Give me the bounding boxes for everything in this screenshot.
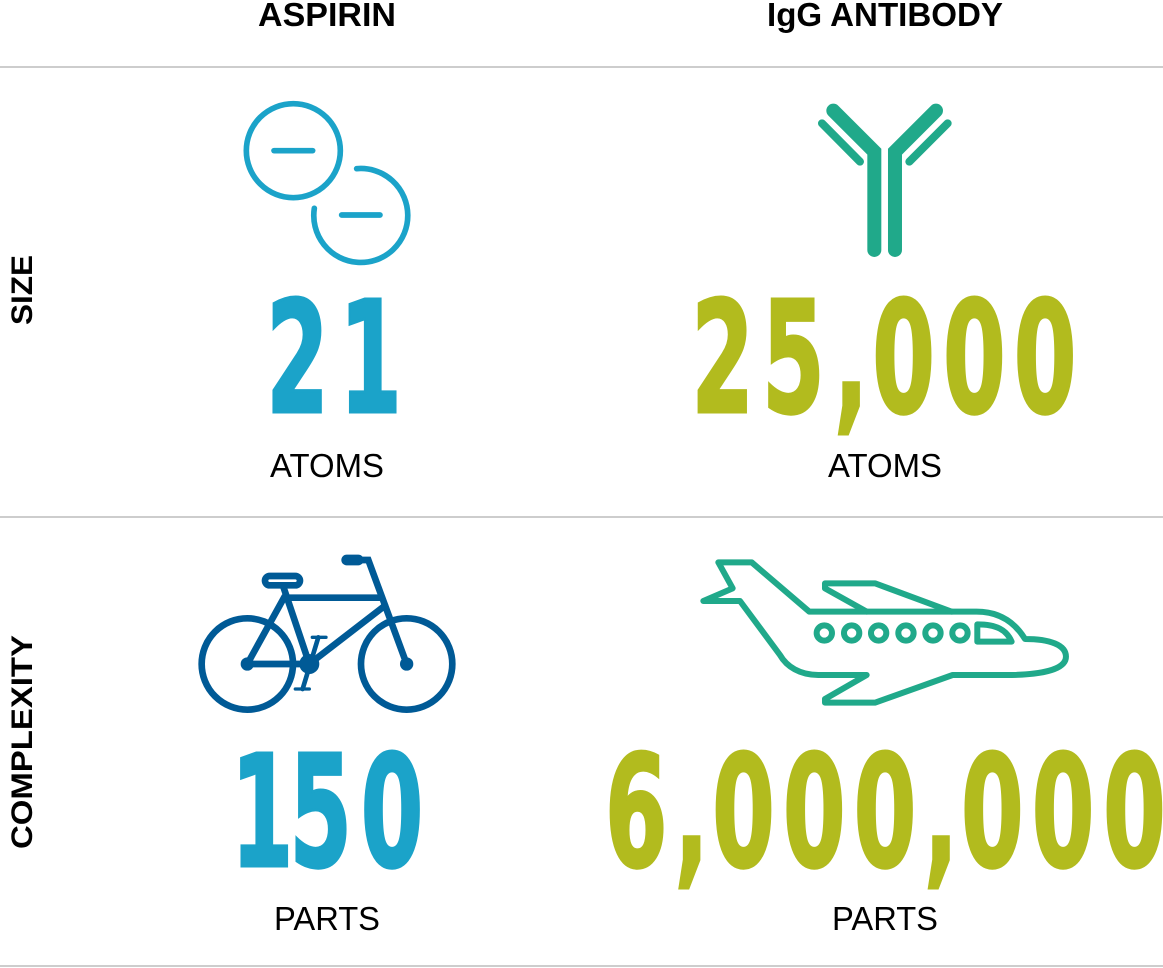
unit: antibody parts: PARTS <box>832 900 938 937</box>
unit: antibody atoms: ATOMS <box>828 447 942 484</box>
number: antibody atoms: 25,000 <box>691 268 1076 449</box>
number: aspirin parts: 150 <box>231 722 423 903</box>
number: aspirin atoms: 21 <box>266 268 402 449</box>
icon: antibody <box>822 111 948 250</box>
icon: ions <box>246 104 408 262</box>
row label: size: SIZE <box>6 255 39 325</box>
unit: aspirin atoms: ATOMS <box>270 447 384 484</box>
icon: airplane <box>703 562 1066 703</box>
unit: aspirin parts: PARTS <box>274 900 380 937</box>
number: antibody parts: 6,000,000 <box>605 722 1163 903</box>
row label: complexity: COMPLEXITY <box>6 635 39 849</box>
icon: bicycle <box>202 560 452 710</box>
